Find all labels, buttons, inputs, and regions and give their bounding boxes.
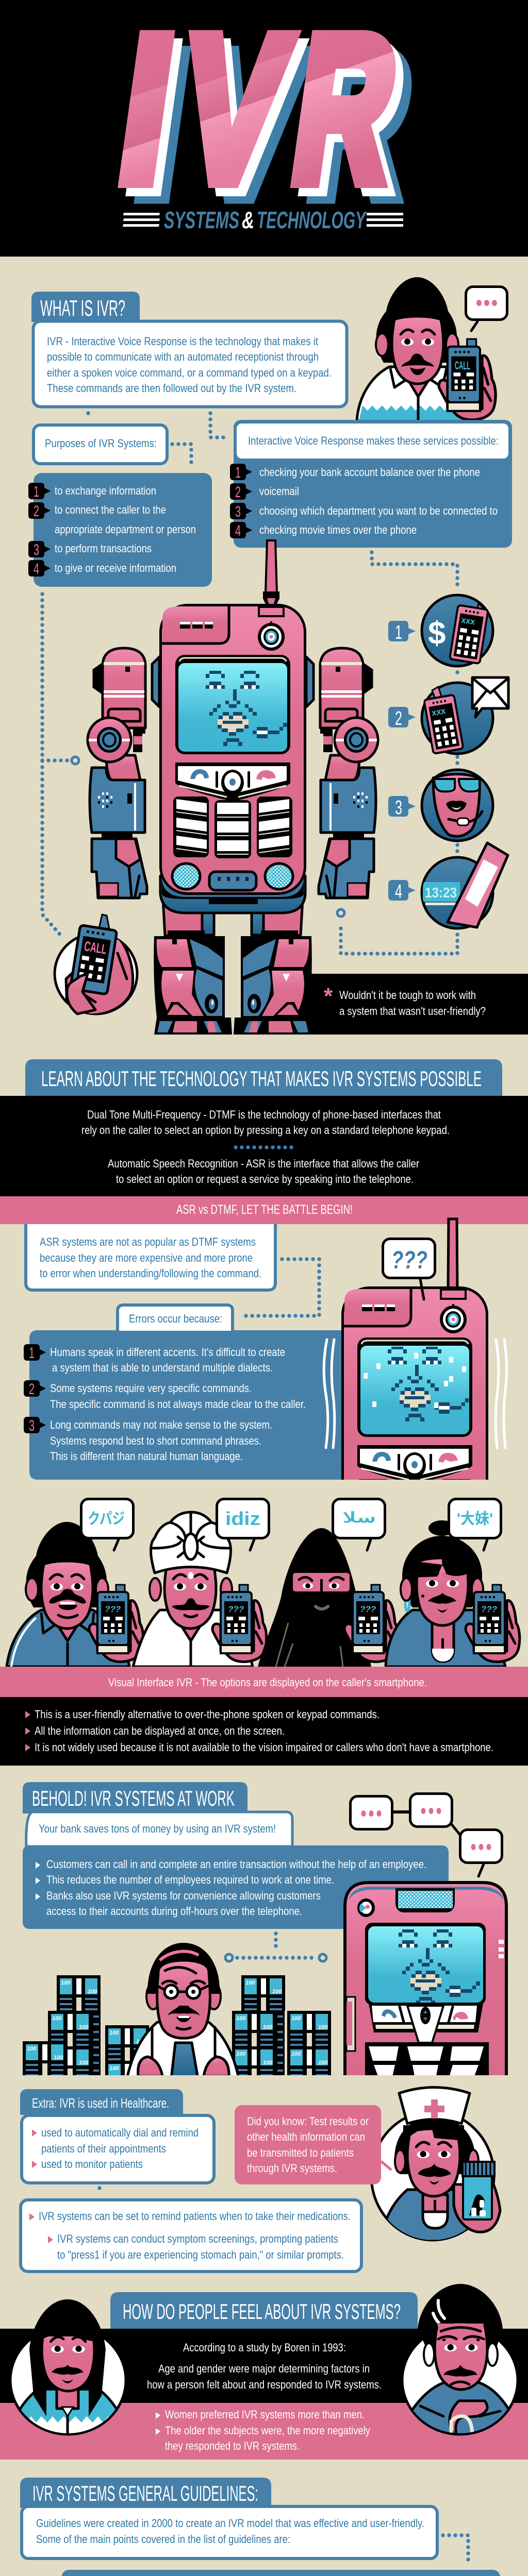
panel: IVR definition: These commands are then followed out by the IVR system. [47,382,296,395]
heading tab: extra healthcare: Extra: IVR is used in Healthcare. [32,2095,169,2111]
panel: IVR at work list: This reduces the number of employees required to work at one time. [46,1873,334,1886]
heading tab: how do people feel [110,2292,418,2331]
robot three phone [343,1881,508,2081]
panel: errors list: This is different than natural human language. [50,1450,243,1463]
heading tab: learn about technology [25,1059,502,1097]
callout: test results: through IVR systems. [247,2162,337,2175]
subtitle stripes and text: & [242,207,254,233]
box: bank saves money: Your bank saves tons of money by using an IVR system! [39,1822,276,1835]
icon: operator headset [422,770,493,841]
panel: errors list: The specific command is not always made clear to the caller. [50,1398,306,1411]
person: woman in niqab: ??? [360,1604,376,1614]
panel: errors list [24,1330,342,1480]
badge 3 [388,796,416,819]
person: man with moustache [7,1522,143,1667]
icon: hand with call phone [55,914,137,1015]
black band: DTMF and ASR: rely on the caller to select an option by pressing a key on a standard telephone keypad. [81,1124,450,1137]
callout: test results: be transmitted to patients [247,2146,354,2159]
money stacks and banker [23,1943,331,2075]
pink band: ASR vs DTMF: ASR vs DTMF, LET THE BATTLE BEGIN! [176,1202,353,1217]
black band: boren study: Age and gender were major determining factors in [158,2362,370,2375]
callout: user-friendly: * [324,984,333,1009]
icon: bank balance phone: $ [428,616,446,651]
number badges: 1 [34,483,39,500]
number badges: 3 [235,503,241,520]
text box: ASR not popular [26,1224,275,1290]
icon: voicemail phone [422,677,508,754]
connector dots [42,552,457,954]
number badges [24,1344,46,1434]
heading tab: extra healthcare [20,2089,183,2117]
subtitle stripes and text: TECHNOLOGY [257,207,367,233]
black band: visual interface notes: All the information can be displayed at once, on the screen. [35,1724,285,1737]
panel: errors list: Systems respond best to short command phrases. [50,1434,261,1447]
person: man with moustache: ??? [105,1604,121,1614]
box: medication reminders: to "press1 if you are experiencing stomach pain," or similar prompts. [57,2248,344,2261]
robot left arm [88,648,159,898]
title: IVR: R [281,0,409,225]
box: guidelines intro: Guidelines were created in 2000 to create an IVR model that was effective and user-friendly. [36,2517,424,2530]
black band: boren study: how a person felt about and responded to IVR systems. [147,2378,382,2391]
speech bubble: foreign 3 [333,1499,385,1550]
header banner [0,0,528,257]
number badges: 2 [29,1381,35,1398]
panel: purposes heading [34,425,167,464]
panel: IVR definition: either a spoken voice command, or a command typed on a keypad. [47,366,332,379]
turban [151,1512,231,1573]
portrait: young woman [10,2299,126,2437]
callout: user-friendly: a system that wasn't user-friendly? [339,1005,486,1018]
box: medication reminders: IVR systems can conduct symptom screenings, prompting patients [57,2232,338,2245]
person: woman with bun [386,1520,520,1667]
panel: purposes list: to perform transactions [55,542,152,555]
panel: IVR definition: IVR - Interactive Voice Response is the technology that makes it [47,335,318,348]
question bubble [383,1239,435,1299]
pink band: visual interface: Visual Interface IVR - The options are displayed on the caller's smartphone. [108,1676,427,1689]
panel: purposes list: to give or receive information [55,562,176,574]
box: healthcare uses [22,2115,214,2183]
panel: IVR definition: possible to communicate with an automated receptionist through [47,350,319,363]
subtitle stripes and text [123,207,403,233]
title: IVR: I [124,9,201,240]
heading tab: guidelines [20,2478,271,2508]
box: guidelines intro [22,2506,437,2558]
man with phone (what is IVR): CALL [455,359,470,372]
panel: services list [230,420,512,548]
robot waist [209,899,258,904]
badge 2: 2 [395,708,402,730]
panel: services list: checking your bank account balance over the phone [259,466,480,479]
panel: purposes list: to connect the caller to the [55,503,166,516]
title: IVR: R [297,9,425,241]
number badges [28,483,51,578]
icon: movie times [422,843,508,928]
robot right arm [306,648,378,898]
number badges [230,464,252,539]
panel: IVR at work list: access to their accounts during off-hours over the telephone. [46,1905,302,1918]
robot antenna [263,540,279,605]
speech bubble: man [466,286,507,331]
person: woman in niqab [258,1528,399,1667]
number badges: 1 [235,464,241,481]
connector dots and rings [225,1934,326,1961]
wavy vibration lines [324,1340,507,1448]
number badges: 2 [34,503,39,520]
robot two face [364,1346,469,1421]
black band: DTMF and ASR [0,1096,528,1197]
man with phone (what is IVR) [357,277,496,421]
speech bubble: foreign 2 [217,1499,269,1550]
number badges: 3 [34,541,39,558]
subtitle stripes and text: SYSTEMS [164,207,239,233]
speech bubble: foreign 4 [449,1499,501,1550]
panel: errors list: a system that is able to understand multiple dialects. [52,1361,273,1374]
robot right leg [234,899,312,1035]
speech bubble: foreign 4: '大妹' [457,1511,493,1528]
callout: test results [235,2105,391,2184]
title: IVR: V [176,1,309,233]
robot base [160,876,305,913]
pink band: visual interface [0,1667,528,1697]
pink band: findings [0,2403,528,2460]
title: IVR: I [116,1,193,232]
icon: bank balance phone [422,595,493,666]
robot one [88,540,378,1035]
heading tab: behold: BEHOLD! IVR SYSTEMS AT WORK [32,1786,235,1810]
box: bank saves money [26,1812,292,1846]
box: medication reminders: IVR systems can be set to remind patients when to take their medications. [39,2210,351,2223]
black band: DTMF and ASR: to select an option or request a service by speaking into the telephone. [116,1173,414,1185]
number badges: 1 [29,1345,35,1362]
callout: test results: Did you know: Test results or [247,2115,369,2128]
speech bubble: foreign 1: クパジ [88,1511,125,1528]
number badges: 4 [34,561,39,578]
pink band: ASR vs DTMF [0,1196,528,1224]
panel: purposes heading: Purposes of IVR Systems: [45,437,157,450]
panel: IVR at work list: Customers can call in and complete an entire transaction without the help of an employee. [46,1858,426,1871]
box: healthcare uses: used to automatically dial and remind [41,2126,199,2139]
badge 1: 1 [395,622,402,643]
heading tab: what is IVR [31,292,140,322]
connector rings [72,757,344,917]
box: healthcare uses: used to monitor patients [41,2158,143,2171]
badge 1 [388,621,416,643]
icon: hand with call phone: CALL [83,938,108,957]
person: man with turban: ??? [228,1604,244,1614]
robot three face [399,1929,480,2005]
speech bubble: foreign 3: سلا [343,1510,376,1526]
banker [126,1943,239,2081]
speech bubble: foreign 1 [81,1499,133,1550]
callout: test results: other health information can [247,2130,365,2143]
panel: IVR at work list: Banks also use IVR systems for convenience allowing customers [46,1889,321,1902]
tab: errors occur [118,1305,233,1331]
box: healthcare uses: patients of their appointments [41,2142,166,2155]
panel: errors list: Long commands may not make sense to the system. [50,1418,272,1431]
icon: movie times: 13:23 [425,885,457,901]
box: guidelines intro: Some of the main points covered in the list of guidelines are: [36,2533,290,2546]
black band: visual interface notes [0,1697,528,1766]
panel: IVR definition [33,321,346,407]
panel: errors list: Humans speak in different accents. It's difficult to create [50,1346,285,1359]
badge 4 [388,880,416,903]
robot left leg [154,899,232,1035]
heading tab: guidelines: IVR SYSTEMS GENERAL GUIDELINES: [32,2481,258,2505]
title: IVR: R [289,2,417,233]
box: medication reminders [21,2200,361,2272]
nurse portrait [371,2088,500,2241]
robot screen face [206,671,287,746]
panel: services list: checking movie times over the phone [259,523,417,536]
heading tab: what is IVR: WHAT IS IVR? [40,296,125,321]
black band: visual interface notes: This is a user-friendly alternative to over-the-phone spoken or keypad commands. [35,1708,380,1721]
panel: purposes list: appropriate department or person [55,523,196,536]
speech bubble: foreign 2: idiz [225,1508,260,1529]
black band: DTMF and ASR: Automatic Speech Recognition - ASR is the interface that allows the caller [108,1157,419,1170]
portrait: old man [402,2284,518,2437]
pink band: findings: The older the subjects were, the more negatively [165,2424,370,2437]
bubble chain [351,1794,502,1876]
text box: ASR not popular: because they are more expensive and more prone [40,1251,253,1264]
callout: user-friendly: Wouldn't it be tough to work with [339,989,476,1002]
number badges: 2 [235,484,241,501]
panel: purposes list [28,473,212,587]
badge 3: 3 [395,797,402,819]
panel: services list: voicemail [259,485,299,498]
person: man with turban [133,1512,267,1667]
number badges: 3 [29,1417,35,1434]
heading tab: behold [23,1782,248,1850]
robot two phone body [341,1286,488,1480]
person: woman with bun: ??? [481,1604,498,1614]
title: IVR: V [184,9,317,240]
panel: IVR at work list [23,1845,449,1929]
robot lower body [162,878,304,899]
text box: ASR not popular: to error when understanding/following the command. [40,1267,261,1280]
tab: errors occur: Errors occur because: [129,1312,222,1325]
black band: DTMF and ASR: Dual Tone Multi-Frequency - DTMF is the technology of phone-based interfaces that [87,1108,441,1121]
question bubble: ??? [391,1247,427,1274]
panel: errors list: Some systems require very specific commands. [50,1382,252,1395]
money stacks [23,1975,331,2096]
callout: user-friendly [302,974,528,1035]
number badges: 4 [235,522,241,539]
black band: boren study [0,2329,528,2403]
panel: guidelines list [62,2570,500,2576]
badge 4: 4 [395,881,402,903]
text box: ASR not popular: ASR systems are not as popular as DTMF systems [40,1235,256,1248]
robot torso [161,605,305,893]
panel: purposes list: to exchange information [55,484,156,497]
pink band: findings: Women preferred IVR systems more than men. [165,2408,365,2421]
robot antenna two [448,1219,457,1288]
badge 2 [388,707,416,730]
black band: boren study: According to a study by Boren in 1993: [183,2341,346,2354]
pink band: findings: they responded to IVR systems. [165,2439,300,2452]
title: IVR [108,0,425,241]
